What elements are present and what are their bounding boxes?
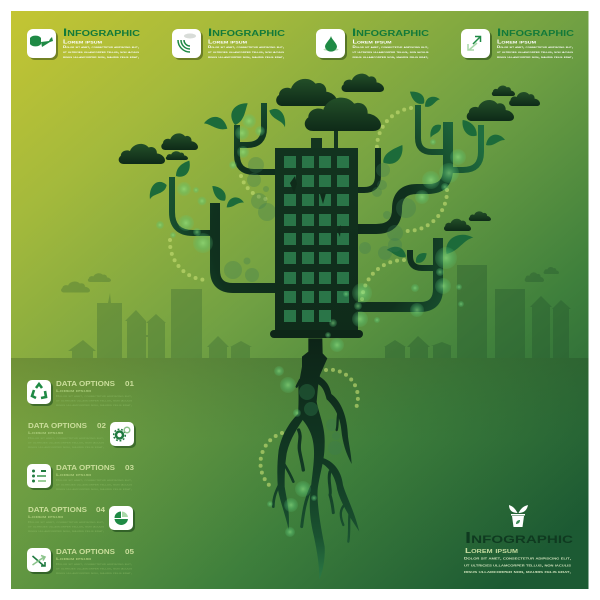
- leaves: right group: [383, 92, 505, 263]
- skyline: left: [61, 273, 252, 358]
- leaves: left group: [150, 103, 285, 207]
- icon tile: [174, 31, 203, 60]
- body text: ut ultricies ullamcorper tellus, non iaculis: [56, 482, 133, 486]
- roots: [273, 338, 359, 579]
- body text: risus ullamcorper non, mauris felis erat,: [497, 55, 573, 59]
- heading: Infographic: [465, 530, 573, 547]
- subtitle: Lorem ipsum: [56, 472, 92, 477]
- data option 02: [28, 422, 136, 449]
- branch: lower right: [350, 238, 438, 307]
- subtitle: Lorem ipsum: [28, 430, 64, 435]
- subheading: Lorem ipsum: [352, 40, 392, 46]
- icon: list: [32, 470, 46, 482]
- grey bubbles: [224, 157, 416, 455]
- icon: potted plant: [509, 505, 528, 527]
- body text: ut ultricies ullamcorper tellus, non iaculis: [208, 50, 285, 54]
- body text: Dolor sit amet, consectetur adipiscing elit,: [208, 45, 284, 49]
- body text: risus ullamcorper non, mauris felis erat,: [208, 55, 284, 59]
- body text: [56, 394, 133, 407]
- glowing bubbles: [156, 114, 466, 537]
- heading: Infographic: [63, 27, 140, 39]
- body text: Dolor sit amet, consectetur adipiscing elit,: [56, 562, 132, 566]
- body text: risus ullamcorper non, mauris felis erat,: [56, 571, 132, 575]
- heading: Infographic: [208, 27, 285, 39]
- subtitle: Lorem ipsum: [28, 514, 64, 519]
- number: 01: [125, 381, 134, 388]
- body text: ut ultricies ullamcorper tellus, non iaculis: [56, 566, 133, 570]
- branch: lower right fork: [410, 250, 438, 268]
- body text: Dolor sit amet, consectetur adipiscing elit,: [352, 45, 429, 49]
- icon tile: [463, 31, 492, 60]
- number: 03: [125, 465, 134, 472]
- ground band: [11, 358, 588, 589]
- header block 3: water drop: [316, 27, 429, 60]
- branch: right forks: [418, 105, 481, 170]
- body text: Dolor sit amet, consectetur adipiscing elit,: [56, 478, 132, 482]
- data option 05: [27, 548, 134, 575]
- heading: Infographic: [497, 27, 574, 39]
- title: DATA OPTIONS: [56, 465, 115, 472]
- body text: ut ultricies ullamcorper tellus, non iaculis: [63, 50, 140, 54]
- icon: recycle: [32, 384, 46, 398]
- header block 4: arrows: [461, 27, 574, 60]
- icon: shuffle: [32, 556, 45, 566]
- small rootlets: [273, 380, 350, 542]
- body text: ut ultricies ullamcorper tellus, non iaculis: [464, 564, 571, 568]
- number: 02: [97, 423, 106, 430]
- icon: gears: [114, 427, 130, 441]
- icon tile: [29, 31, 58, 60]
- skyline: right: [384, 265, 571, 358]
- title: DATA OPTIONS: [28, 507, 87, 514]
- icon tile: [111, 508, 135, 532]
- data option 01: [27, 380, 134, 407]
- body text: [208, 45, 285, 59]
- number: 04: [96, 507, 105, 514]
- header block 1: watering can: [27, 27, 140, 60]
- upper right limb: [317, 376, 352, 464]
- right mid limb: [322, 458, 359, 532]
- header block 2: signal: [172, 27, 285, 60]
- clouds: [119, 74, 540, 231]
- dotted arcs: [170, 108, 447, 486]
- icon tile: [29, 466, 53, 490]
- dim bubbles over the trunk: [299, 384, 318, 416]
- branch: right short: [356, 148, 378, 190]
- body text: ut ultricies ullamcorper tellus, non iaculis: [56, 398, 133, 402]
- icon tile: [29, 382, 53, 406]
- branch: upper left: [237, 125, 278, 172]
- title: DATA OPTIONS: [56, 381, 115, 388]
- title: DATA OPTIONS: [56, 549, 115, 556]
- subheading: Lorem ipsum: [63, 40, 103, 46]
- body text: risus ullamcorper non, mauris felis erat,: [28, 529, 104, 533]
- icon: pie chart: [114, 512, 128, 525]
- body text: ut ultricies ullamcorper tellus, non iaculis: [28, 440, 105, 444]
- subtitle: Lorem ipsum: [56, 388, 92, 393]
- subheading: Lorem ipsum: [208, 40, 248, 46]
- body text: [63, 45, 140, 59]
- body text: risus ullamcorper non, mauris felis erat,: [63, 55, 139, 59]
- body text: Dolor sit amet, consectetur adipiscing elit,: [28, 520, 104, 524]
- body text: ut ultricies ullamcorper tellus, non iaculis: [28, 524, 105, 528]
- body text: [28, 520, 105, 533]
- building base: [270, 330, 363, 338]
- branch: right S curve: [356, 122, 448, 229]
- icon: signal arcs: [178, 40, 190, 52]
- icon: faint cloud: [184, 34, 196, 38]
- icon: diagonal arrows: [468, 36, 480, 50]
- body text: [56, 478, 133, 491]
- body text: [497, 45, 574, 59]
- branch: lower left: [215, 203, 280, 288]
- tower body: [275, 148, 358, 332]
- body text: risus ullamcorper non, mauris felis erat,: [464, 570, 571, 574]
- body text: Dolor sit amet, consectetur adipiscing elit,: [497, 45, 573, 49]
- body text: Dolor sit amet, consectetur adipiscing elit,: [56, 394, 132, 398]
- branch: upper left fork: [237, 103, 264, 145]
- body text: [28, 436, 105, 449]
- subheading: Lorem ipsum: [465, 548, 518, 555]
- building: [270, 115, 363, 338]
- window shadows: [290, 176, 341, 237]
- rooftop and antenna: [311, 115, 338, 148]
- body text: [56, 562, 133, 575]
- tree branches: [172, 103, 481, 307]
- icon tile: [29, 550, 53, 574]
- icon tile: [318, 31, 347, 60]
- icon: watering can: [30, 36, 53, 47]
- subtitle: Lorem ipsum: [56, 556, 92, 561]
- body text: Dolor sit amet, consectetur adipiscing elit,: [28, 436, 104, 440]
- body text: ut ultricies ullamcorper tellus, non iaculis: [352, 50, 429, 54]
- body text: Dolor sit amet, consectetur adipiscing elit,: [464, 556, 571, 560]
- body text: [464, 556, 571, 574]
- bottom right block: [464, 505, 573, 574]
- data option 03: [27, 464, 134, 491]
- icon: water drop: [324, 48, 338, 51]
- body text: risus ullamcorper non, mauris felis erat,: [352, 55, 429, 59]
- windows: [284, 156, 349, 322]
- body text: Dolor sit amet, consectetur adipiscing elit,: [63, 45, 139, 49]
- subheading: Lorem ipsum: [497, 40, 537, 46]
- main root: [298, 338, 327, 579]
- icon tile: [112, 424, 136, 448]
- branch: far left: [172, 177, 215, 233]
- body text: risus ullamcorper non, mauris felis erat,: [56, 403, 132, 407]
- left limb: [277, 413, 306, 530]
- number: 05: [125, 549, 134, 556]
- heading: Infographic: [352, 27, 429, 39]
- body text: ut ultricies ullamcorper tellus, non iaculis: [497, 50, 574, 54]
- body text: risus ullamcorper non, mauris felis erat,: [56, 487, 132, 491]
- body text: [352, 45, 429, 59]
- title: DATA OPTIONS: [28, 423, 87, 430]
- data option 04: [28, 506, 135, 533]
- body text: risus ullamcorper non, mauris felis erat,: [28, 445, 104, 449]
